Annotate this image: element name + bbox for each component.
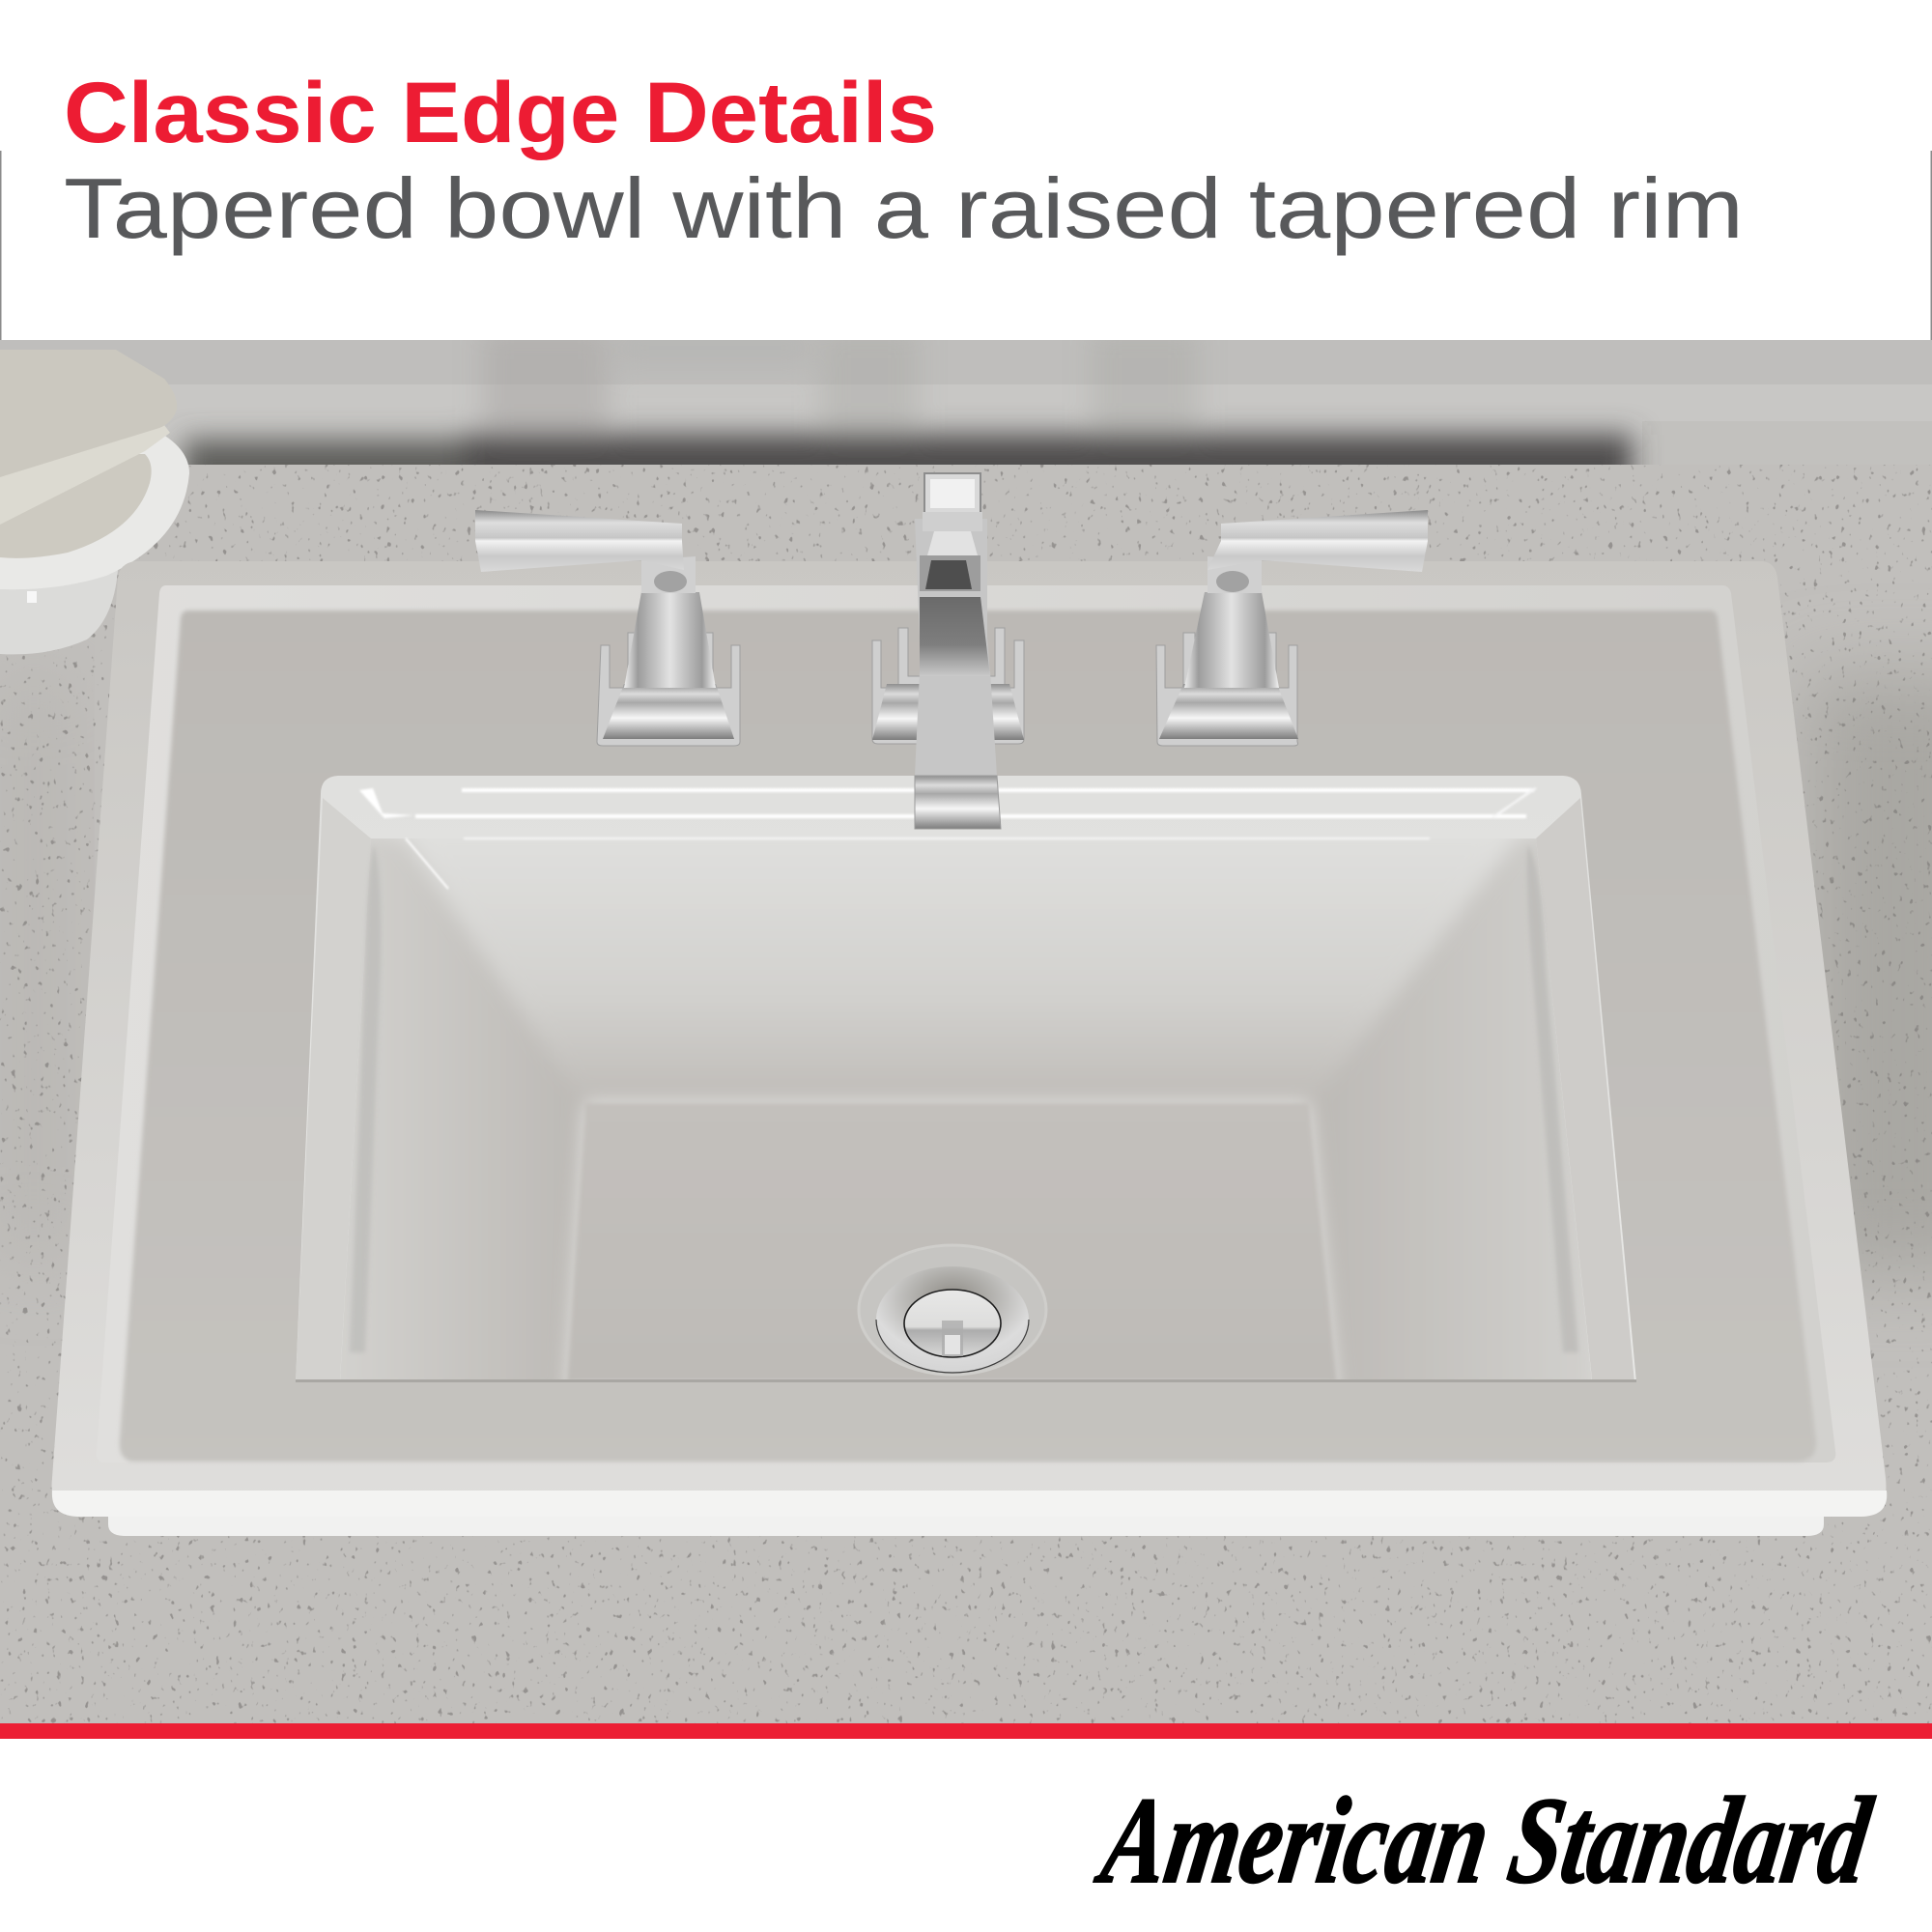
sink: raised inner band (97, 585, 1835, 1463)
left handle: stepped base (603, 684, 734, 739)
spout: top cube (924, 473, 980, 514)
bowl: floor (567, 1103, 1337, 1381)
white header panel (0, 0, 1932, 340)
soap dish: pedestal (0, 570, 118, 654)
faucet: right handle (1156, 510, 1428, 746)
spout: neck (915, 671, 997, 776)
faucet: left handle (475, 510, 740, 746)
drain (859, 1245, 1046, 1375)
right handle: lever (1208, 510, 1428, 572)
bowl: left wall (340, 838, 591, 1379)
left handle: stem (641, 556, 696, 593)
bowl: side wall slivers (350, 845, 1578, 1352)
photo: speckled countertop (0, 465, 1932, 1724)
sink: lower skirt (108, 1497, 1824, 1536)
bowl: right rim band (1536, 798, 1634, 1382)
soap dish: inner bowl (0, 454, 152, 558)
bowl: front edge lines (296, 1379, 1636, 1382)
sink: tapered bowl (296, 776, 1636, 1401)
bowl: rim highlights (359, 788, 1536, 889)
soap dish: rim (0, 425, 189, 589)
left handle: base plate (597, 633, 740, 746)
bowl: back wall (468, 893, 1449, 1106)
left handle: lever (475, 510, 684, 572)
spout: tip (915, 776, 1001, 829)
left handle: column (624, 592, 716, 688)
bowl: blended tapered walls (319, 821, 1604, 1401)
right handle: column (1184, 592, 1279, 688)
photo: soap dish and soap (0, 350, 189, 654)
right handle: base plate (1156, 633, 1298, 746)
bowl: left rim band (296, 798, 371, 1382)
drain: plug (904, 1290, 1001, 1357)
spout: base plate (872, 628, 1024, 744)
bowl: rim surface (296, 776, 1636, 1382)
right handle: stem (1208, 556, 1262, 593)
sink: top deck (120, 611, 1816, 1462)
heading: Classic Edge Details (64, 64, 937, 160)
soap: top surface (0, 350, 177, 477)
bowl: floor back edge (591, 1109, 1304, 1113)
spout: stepped base (872, 684, 1024, 740)
drain: chrome ring (876, 1266, 1029, 1373)
drain: halo ring (859, 1245, 1046, 1375)
red divider bar (0, 1723, 1932, 1739)
white footer panel (0, 1739, 1932, 1932)
sink: front lip (52, 1491, 1887, 1517)
photo: vanity back wall (0, 340, 1932, 465)
subheading: Tapered bowl with a raised tapered rim (64, 160, 1744, 256)
faucet: center spout (872, 473, 1024, 829)
right handle: stepped base (1159, 684, 1298, 739)
sink: main basin body (52, 561, 1887, 1536)
spout: body (915, 519, 990, 676)
sink: outer edge (52, 561, 1886, 1517)
bowl: right wall (1309, 821, 1604, 1401)
soap: front face (0, 421, 170, 525)
